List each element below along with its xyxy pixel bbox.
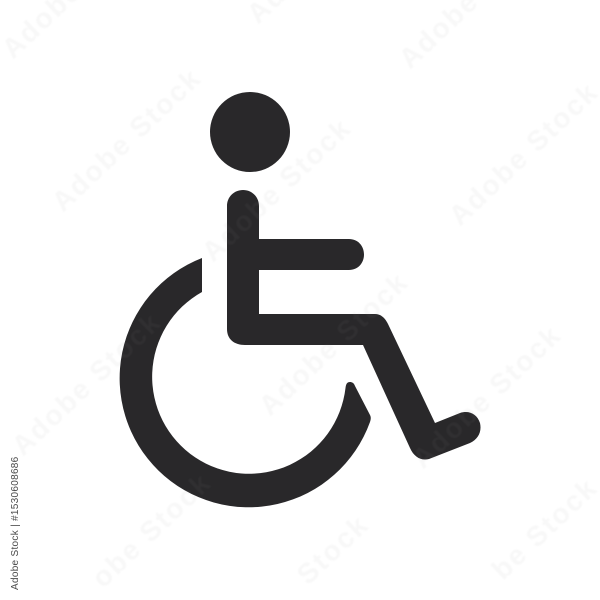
icon: body, arm and leg [227, 190, 481, 460]
stock watermarks: Adobe Stock [6, 306, 167, 461]
stock watermarks: be Stock [486, 472, 600, 585]
stock watermarks: Adobe Stock [46, 62, 207, 217]
icon: head [210, 92, 290, 172]
icon: wheel [120, 258, 371, 507]
stock watermarks: Stock [291, 508, 375, 590]
icon: wheelchair user [120, 92, 481, 507]
stock watermarks: obe Stock [86, 466, 217, 593]
stock watermarks: Adobe Stock [253, 266, 414, 421]
stock watermarks: Adobe Stock [406, 319, 567, 474]
stock watermarks: Adobe Stock [443, 76, 600, 231]
stock watermarks: Adobe Stock [196, 112, 357, 267]
stock ID side text: Adobe Stock | #1530608686 [10, 456, 21, 590]
